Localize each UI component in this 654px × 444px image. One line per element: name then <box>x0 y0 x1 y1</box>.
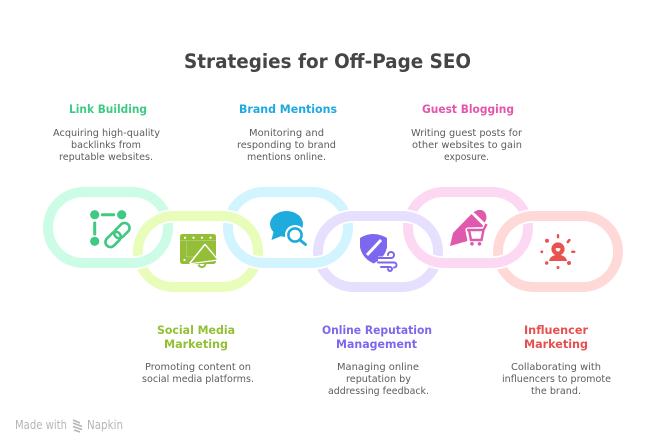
panel: Social Media Marketing <box>142 323 254 385</box>
watermark: Made with Napkin <box>15 418 123 432</box>
panel: Brand Mentions <box>237 102 337 163</box>
heading: Online Reputation Management: Online Reputation <box>322 323 432 337</box>
description: Influencer Marketing: Collaborating with <box>511 362 601 373</box>
description: Link Building: reputable websites. <box>59 152 153 163</box>
description: Guest Blogging: other websites to gain <box>412 140 522 151</box>
heading: Influencer Marketing: Marketing <box>524 337 588 351</box>
description: Brand Mentions: mentions online. <box>247 152 326 163</box>
description: Link Building <box>53 128 160 163</box>
title: Strategies for Off-Page SEO <box>184 50 471 73</box>
description: Guest Blogging: exposure. <box>444 152 489 163</box>
icon: speech bubble and magnifier <box>270 211 306 245</box>
heading: Online Reputation Management: Management <box>336 337 417 351</box>
description: Influencer Marketing: the brand. <box>531 386 581 397</box>
ring: Online Reputation Management <box>318 216 438 287</box>
heading: Brand Mentions: Brand Mentions <box>239 102 337 116</box>
watermark: Made with Napkin: Made with <box>15 418 67 432</box>
panel: Link Building <box>53 102 160 163</box>
icon: influencer <box>540 234 576 269</box>
description: Brand Mentions: responding to brand <box>237 140 336 151</box>
icon: link building <box>90 210 132 249</box>
heading: Guest Blogging: Guest Blogging <box>422 102 514 116</box>
ring: Social Media Marketing <box>138 216 258 287</box>
heading: Influencer Marketing: Influencer <box>524 323 588 337</box>
description: Social Media Marketing <box>142 362 254 385</box>
description: Online Reputation Management: reputation by <box>346 374 411 385</box>
description: Influencer Marketing: influencers to promote <box>502 374 611 385</box>
panel: Influencer Marketing <box>502 323 611 397</box>
watermark: Made with Napkin: Napkin <box>87 418 123 432</box>
icon: pen and cart <box>450 210 486 246</box>
panel: Guest Blogging <box>411 102 523 163</box>
description: Brand Mentions <box>237 128 336 163</box>
description: Online Reputation Management: Managing online <box>337 362 419 373</box>
description: Influencer Marketing <box>502 362 611 397</box>
description: Online Reputation Management: addressing feedback. <box>328 386 429 397</box>
icon: video and megaphone <box>180 234 217 267</box>
ring: Brand Mentions <box>228 192 348 263</box>
ring: Link Building <box>48 192 168 263</box>
description: Guest Blogging: Writing guest posts for <box>411 128 523 139</box>
panel: Online Reputation Management <box>322 323 432 397</box>
description: Guest Blogging <box>411 128 523 163</box>
heading: Link Building: Link Building <box>69 102 147 116</box>
description: Social Media Marketing: social media platforms. <box>142 374 254 385</box>
icon: shield and wind <box>360 234 398 271</box>
description: Link Building: backlinks from <box>71 140 141 151</box>
heading: Social Media Marketing: Social Media <box>157 323 235 337</box>
ring: Influencer Marketing <box>498 216 618 287</box>
ring: Guest Blogging <box>408 192 528 263</box>
description: Social Media Marketing: Promoting content on <box>145 362 251 373</box>
description: Brand Mentions: Monitoring and <box>249 128 324 139</box>
heading: Online Reputation Management <box>322 323 432 351</box>
heading: Influencer Marketing <box>524 323 588 351</box>
description: Online Reputation Management <box>328 362 429 397</box>
heading: Social Media Marketing <box>157 323 235 351</box>
description: Link Building: Acquiring high-quality <box>53 128 160 139</box>
chain of interlocking rings <box>48 192 618 287</box>
heading: Social Media Marketing: Marketing <box>164 337 228 351</box>
